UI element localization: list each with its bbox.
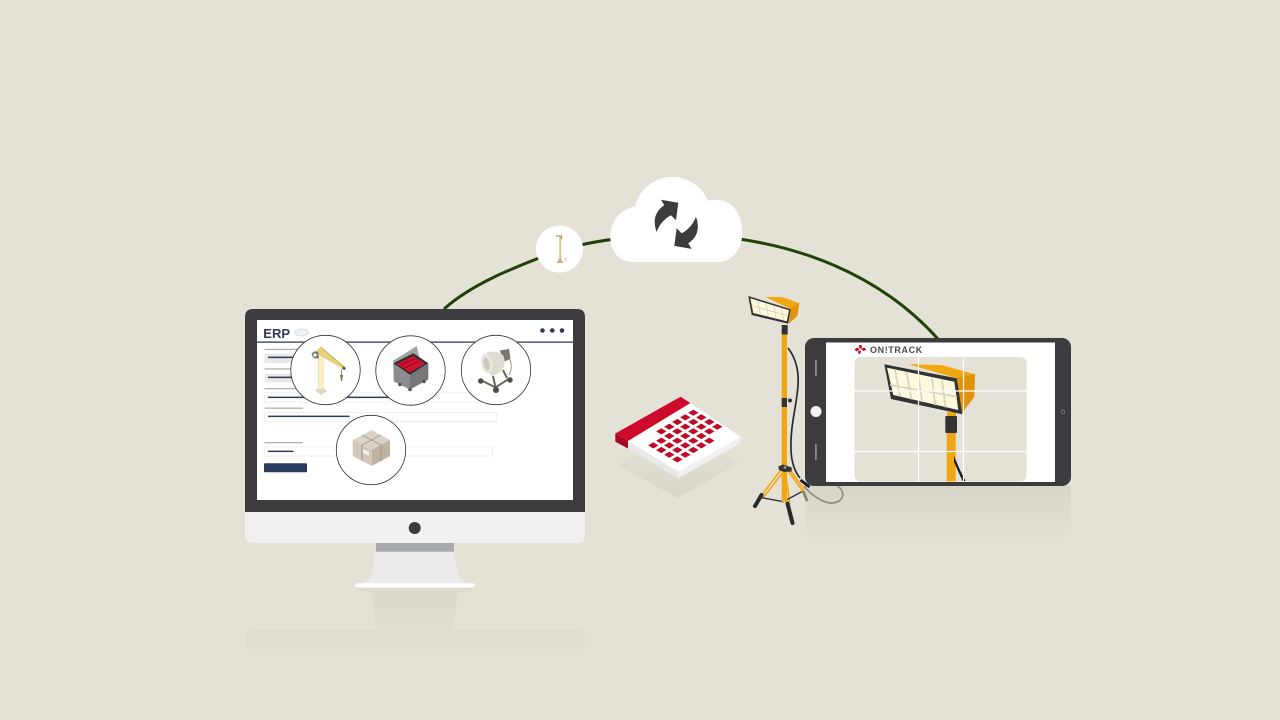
tablet screen — [826, 342, 1055, 482]
monitor chin — [245, 510, 585, 543]
monitor reflection — [245, 588, 586, 656]
floodlight power cable — [788, 348, 843, 503]
circle: parcel — [336, 415, 406, 485]
connection arc — [444, 234, 938, 339]
icon: sync arrows — [655, 200, 698, 249]
cloud with sync arrows — [610, 177, 742, 262]
circle: crane — [291, 335, 360, 405]
lamp panel — [748, 296, 791, 324]
camera dot — [409, 522, 421, 534]
pole — [782, 334, 787, 502]
big floodlight — [884, 364, 975, 482]
cable plug — [800, 480, 810, 487]
home button — [810, 406, 822, 417]
icon: gear — [295, 329, 308, 336]
form fields — [264, 349, 497, 472]
ERP heading: ERP — [263, 326, 290, 341]
camera view panel — [854, 357, 1026, 482]
calendar page top — [628, 403, 741, 472]
calendar red header — [615, 397, 690, 441]
logo: ON!TRACK: ON!TRACK — [870, 345, 923, 355]
monitor — [245, 309, 585, 588]
ERP screen — [257, 320, 573, 500]
focus grid — [854, 357, 1026, 482]
calendar — [615, 397, 741, 498]
monitor bezel — [245, 309, 585, 512]
calendar page sides — [628, 441, 678, 478]
calendar days — [648, 410, 722, 462]
calendar shadow — [618, 430, 740, 498]
menu dots — [540, 328, 564, 333]
monitor stand — [355, 543, 475, 588]
side slits — [815, 360, 817, 460]
circle: concrete mixer — [461, 335, 531, 405]
node: small crane circle — [536, 226, 583, 272]
lamp housing — [765, 297, 799, 323]
circle: chest — [376, 336, 445, 405]
submit button — [264, 463, 307, 472]
camera — [1061, 410, 1065, 414]
tablet — [805, 338, 1071, 486]
tripod legs — [755, 470, 807, 523]
floodlight on tripod — [748, 296, 807, 523]
tablet reflection — [805, 486, 1071, 542]
header rule — [257, 341, 573, 343]
